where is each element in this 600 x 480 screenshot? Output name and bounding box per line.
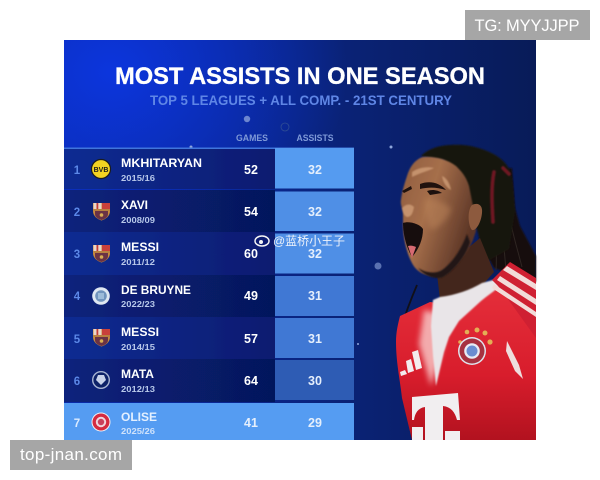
row 4: De Bruyne: DE BRUYNE [121,283,191,297]
watermark: TG: TG: MYYJJPP [474,17,580,35]
open mouth [403,222,423,257]
face [401,157,476,276]
column heading: games: GAMES [236,133,268,143]
watermark: TG [465,10,590,40]
row 6: Mata: 2012/13 [121,385,156,394]
row 1: Mkhitaryan: 1 [74,165,81,177]
row 7: Olise (highlighted): 2025/26 [121,427,156,436]
subtitle: TOP 5 LEAGUES + ALL COMP. - 21ST CENTURY [150,92,453,108]
row 6: Mata: 6 [74,376,80,388]
shoulder stripes [492,262,536,338]
row 1: Mkhitaryan [64,148,354,189]
row 1: Mkhitaryan: 32 [308,163,322,177]
row 4: De Bruyne: 4 [74,291,81,303]
row 5: Messi 2014/15: 31 [308,332,322,346]
tongue and lip [408,246,416,258]
row 3: Messi 2011/12: 3 [74,249,80,261]
dreadlocks mass [484,168,536,282]
title: MOST ASSISTS IN ONE SEASON [115,63,485,90]
panel: dark blue background [64,40,536,440]
row 3: Messi 2011/12 [64,232,354,275]
ranking table [64,148,354,440]
player illustration [396,145,536,440]
red dreads [492,168,509,222]
row 2: Xavi: 54 [244,205,258,219]
row 6: Mata [64,359,354,402]
row 6: Mata: MATA [121,367,154,381]
row 1: Mkhitaryan: 2015/16 [121,174,156,183]
row 5: Messi 2014/15: MESSI [121,325,159,339]
row 3: Messi 2011/12: 32 [308,247,322,261]
row 6: Mata: 64 [244,374,258,388]
row 2: Xavi: 2008/09 [121,216,156,225]
row 5: Messi 2014/15: 2014/15 [121,343,156,352]
row 3: Messi 2011/12: 2011/12 [121,258,156,267]
table top rule [64,148,354,149]
beard [418,234,470,278]
neck [437,238,494,300]
white collar blaze [431,279,499,386]
row 2: Xavi: 32 [308,205,322,219]
brow and eyes [402,182,446,193]
shirt body [396,278,536,440]
row 7: Olise (highlighted) [64,403,354,440]
row 2: Xavi [64,190,354,232]
club stars [458,328,493,345]
decorative particles [190,116,392,345]
row 1: Mkhitaryan: MKHITARYAN [121,156,202,170]
pink sheen [419,310,449,386]
column heading: assists: ASSISTS [296,133,334,143]
row 2: Xavi: XAVI [121,198,148,212]
row 6: Mata: 30 [308,374,322,388]
row 4: De Bruyne: 31 [308,289,322,303]
Bayern crest [458,337,486,365]
row 4: De Bruyne: 49 [244,289,258,303]
hair top [421,145,515,263]
row 5: Messi 2014/15 [64,317,354,359]
row 4: De Bruyne: 2022/23 [121,300,156,309]
row 4: De Bruyne [64,275,354,317]
row 2: Xavi: 2 [74,207,80,219]
side white panel [506,341,523,379]
row 7: Olise (highlighted): OLISE [121,410,157,424]
row 7: Olise (highlighted): 7 [74,418,80,430]
dreadlock strands [494,190,522,272]
row 1: Mkhitaryan: BVB [94,167,108,174]
row 7: Olise (highlighted): 29 [308,416,322,430]
row 1: Mkhitaryan: 52 [244,163,258,177]
row 3: Messi 2011/12: MESSI [121,240,159,254]
T logo [412,393,460,440]
row 7: Olise (highlighted): 41 [244,416,258,430]
watermark: site: top-jnan.com [20,445,122,464]
row 5: Messi 2014/15: 5 [74,334,81,346]
row 5: Messi 2014/15: 57 [244,332,258,346]
weibo watermark: @蓝桥小王子 [273,234,345,248]
adidas stripes [400,350,422,376]
stray strand [400,285,417,331]
face highlights [402,167,451,217]
ear [469,204,482,230]
row 3: Messi 2011/12: 60 [244,247,258,261]
watermark: site [10,440,132,470]
